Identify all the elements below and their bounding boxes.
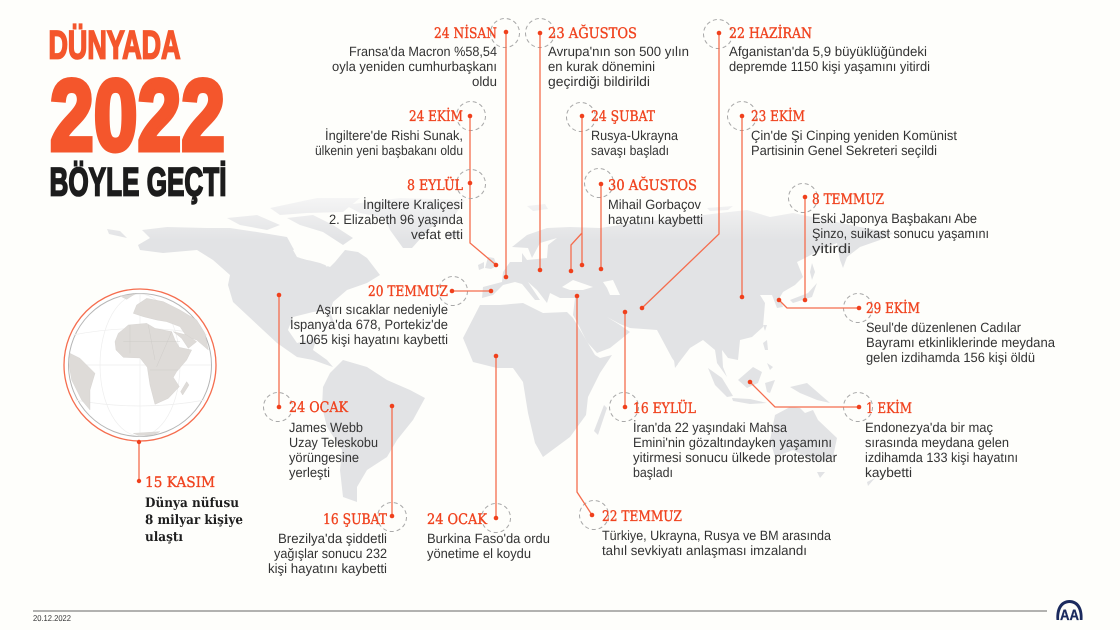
event: 1 Ekim: izdihamda 133 kişi hayatını [865,450,1018,465]
world map [107,198,893,502]
event: 22 Haziran: Afganistan'da 5,9 büyüklüğündeki [729,44,927,59]
event: 24 Ocak James Webb: James Webb [289,420,363,435]
event: 29 Ekim: Seul'de düzenlenen Cadılar [866,320,1021,335]
event: 16 Eylül: 16 EYLÜL [633,399,696,417]
event: 24 Ocak James Webb [264,293,378,480]
callout: 15 Kasım: ulaştı [145,530,183,545]
event: 1 Ekim: sırasında meydana gelen [865,435,1009,450]
event: 24 Ekim: 24 EKİM [409,107,463,125]
event: 24 Ocak Burkina Faso: Burkina Faso'da ordu [427,531,550,546]
callout: 15 Kasım [137,440,243,545]
callout: 15 Kasım: Dünya nüfusu [145,496,239,511]
event: 24 Ekim: İngiltere'de Rishi Sunak, [325,128,463,143]
event: 8 Temmuz: Şinzo, suikast sonucu yaşamını [812,226,989,241]
event: 1 Ekim: 1 EKİM [866,399,912,417]
event: 24 Ekim [315,102,496,265]
event: 16 Şubat [268,404,406,576]
event: 22 Temmuz: Türkiye, Ukrayna, Rusya ve BM arasında [602,528,831,543]
event: 29 Ekim: 29 EKİM [866,299,920,317]
event: 8 Eylül: 8 EYLÜL [407,176,463,194]
event: 22 Haziran [640,20,930,310]
event: 29 Ekim [777,294,1055,365]
event: 24 Nisan: 24 NİSAN [434,24,497,42]
event: 24 Nisan: oldu [472,74,497,89]
icon: AA logo: AA [1060,607,1079,624]
event: 1 Ekim: Endonezya'da bir maç [865,420,993,435]
event: 30 Ağustos: 30 AĞUSTOS [608,176,697,194]
event: 1 Ekim [748,380,1018,480]
event: 20 Temmuz: 20 TEMMUZ [368,284,448,300]
title line: 2022: 2022 [50,60,225,172]
event: 20 Temmuz: 1065 kişi hayatını kaybetti [299,332,448,347]
event: 23 Ağustos: 23 AĞUSTOS [548,24,637,42]
event: 16 Eylül: başladı [633,465,673,480]
event: 16 Şubat: kişi hayatını kaybetti [268,561,387,576]
event: 20 Temmuz: İspanya'da 678, Portekiz'de [290,317,448,332]
event: 24 Şubat [566,102,678,273]
footer date: 20.12.2022 [33,613,71,623]
event: 24 Şubat: Rusya-Ukrayna [591,128,678,143]
event: 23 Ağustos [526,18,689,272]
event: 23 Ağustos: en kurak dönemini [548,59,655,74]
event: 30 Ağustos: Mihail Gorbaçov [608,197,701,212]
event: 24 Ocak Burkina Faso: 24 OCAK [427,512,488,528]
event: 24 Ocak Burkina Faso: yönetime el koydu [427,546,531,561]
event: 23 Ekim: Partisinin Genel Sekreteri seçildi [751,143,937,158]
event: 24 Şubat: savaşı başladı [591,143,669,158]
footer [33,600,1083,624]
event: 24 Nisan [332,18,520,279]
event: 24 Nisan: oyla yeniden cumhurbaşkanı [332,59,497,74]
event: 8 Eylül: vefat etti [411,227,463,242]
icon: AA logo [1056,600,1083,624]
event: 22 Haziran: depremde 1150 kişi yaşamını yitirdi [729,59,930,74]
event: 29 Ekim: Bayramı etkinliklerinde meydana [866,335,1055,350]
event: 23 Ekim [728,102,957,299]
event: 30 Ağustos [584,168,703,271]
callout: 15 Kasım: 15 KASIM [145,475,215,491]
event: 8 Temmuz [788,184,989,302]
event: 8 Eylül [329,170,498,267]
event: 22 Temmuz: tahıl sevkiyatı anlaşması imzalandı [602,543,807,558]
event: 20 Temmuz: Aşırı sıcaklar nedeniyle [316,302,448,317]
globe [64,289,216,441]
event: 8 Temmuz: yitirdi [812,241,851,256]
callout: 15 Kasım: 8 milyar kişiye [145,513,243,528]
event: 16 Şubat: yağışlar sonucu 232 [274,546,387,561]
event: 8 Temmuz: Eski Japonya Başbakanı Abe [812,211,977,226]
event: 23 Ağustos: Avrupa'nın son 500 yılın [548,44,689,59]
event: 24 Ocak James Webb: yerleşti [289,465,330,480]
event: 30 Ağustos: hayatını kaybetti [608,212,703,227]
event: 24 Nisan: Fransa'da Macron %58,54 [349,44,497,59]
event: 16 Eylül [610,310,837,480]
event: 22 Haziran: 22 HAZİRAN [729,24,812,42]
event: 23 Ekim: 23 EKİM [751,107,805,125]
title line: Dünyada: DÜNYADA [48,24,180,68]
event: 8 Eylül: 2. Elizabeth 96 yaşında [329,212,463,227]
title line: Böyle geçti: BÖYLE GEÇTİ [50,160,226,204]
event: 23 Ekim: Çin'de Şi Cinping yeniden Komünist [751,128,957,143]
event: 24 Ocak James Webb: Uzay Teleskobu [289,435,378,450]
event: 16 Şubat: Brezilya'da şiddetli [278,531,387,546]
event: 8 Eylül: İngiltere Kraliçesi [363,197,463,212]
event: 16 Eylül: İran'da 22 yaşındaki Mahsa [633,420,787,435]
event: 24 Ocak James Webb: yörüngesine [289,450,359,465]
event: 24 Şubat: 24 ŞUBAT [591,109,655,125]
event: 24 Ocak James Webb: 24 OCAK [289,400,349,416]
event: 8 Temmuz: 8 TEMMUZ [812,192,884,208]
event: 24 Ekim: ülkenin yeni başbakanı oldu [315,143,463,158]
event: 22 Temmuz [575,294,831,558]
event: 29 Ekim: gelen izdihamda 156 kişi öldü [866,350,1035,365]
title [48,24,226,204]
event: 1 Ekim: kaybetti [865,465,912,480]
event: 23 Ağustos: geçirdiği bildirildi [548,74,650,89]
event: 20 Temmuz [290,276,493,347]
event: 24 Ocak Burkina Faso [427,354,550,561]
event: 16 Eylül: Emini'nin gözaltındayken yaşamını [633,435,832,450]
event: 16 Eylül: yitirmesi sonucu ülkede protestolar [633,450,837,465]
event: 22 Temmuz: 22 TEMMUZ [602,509,682,525]
event: 16 Şubat: 16 ŞUBAT [323,512,387,528]
